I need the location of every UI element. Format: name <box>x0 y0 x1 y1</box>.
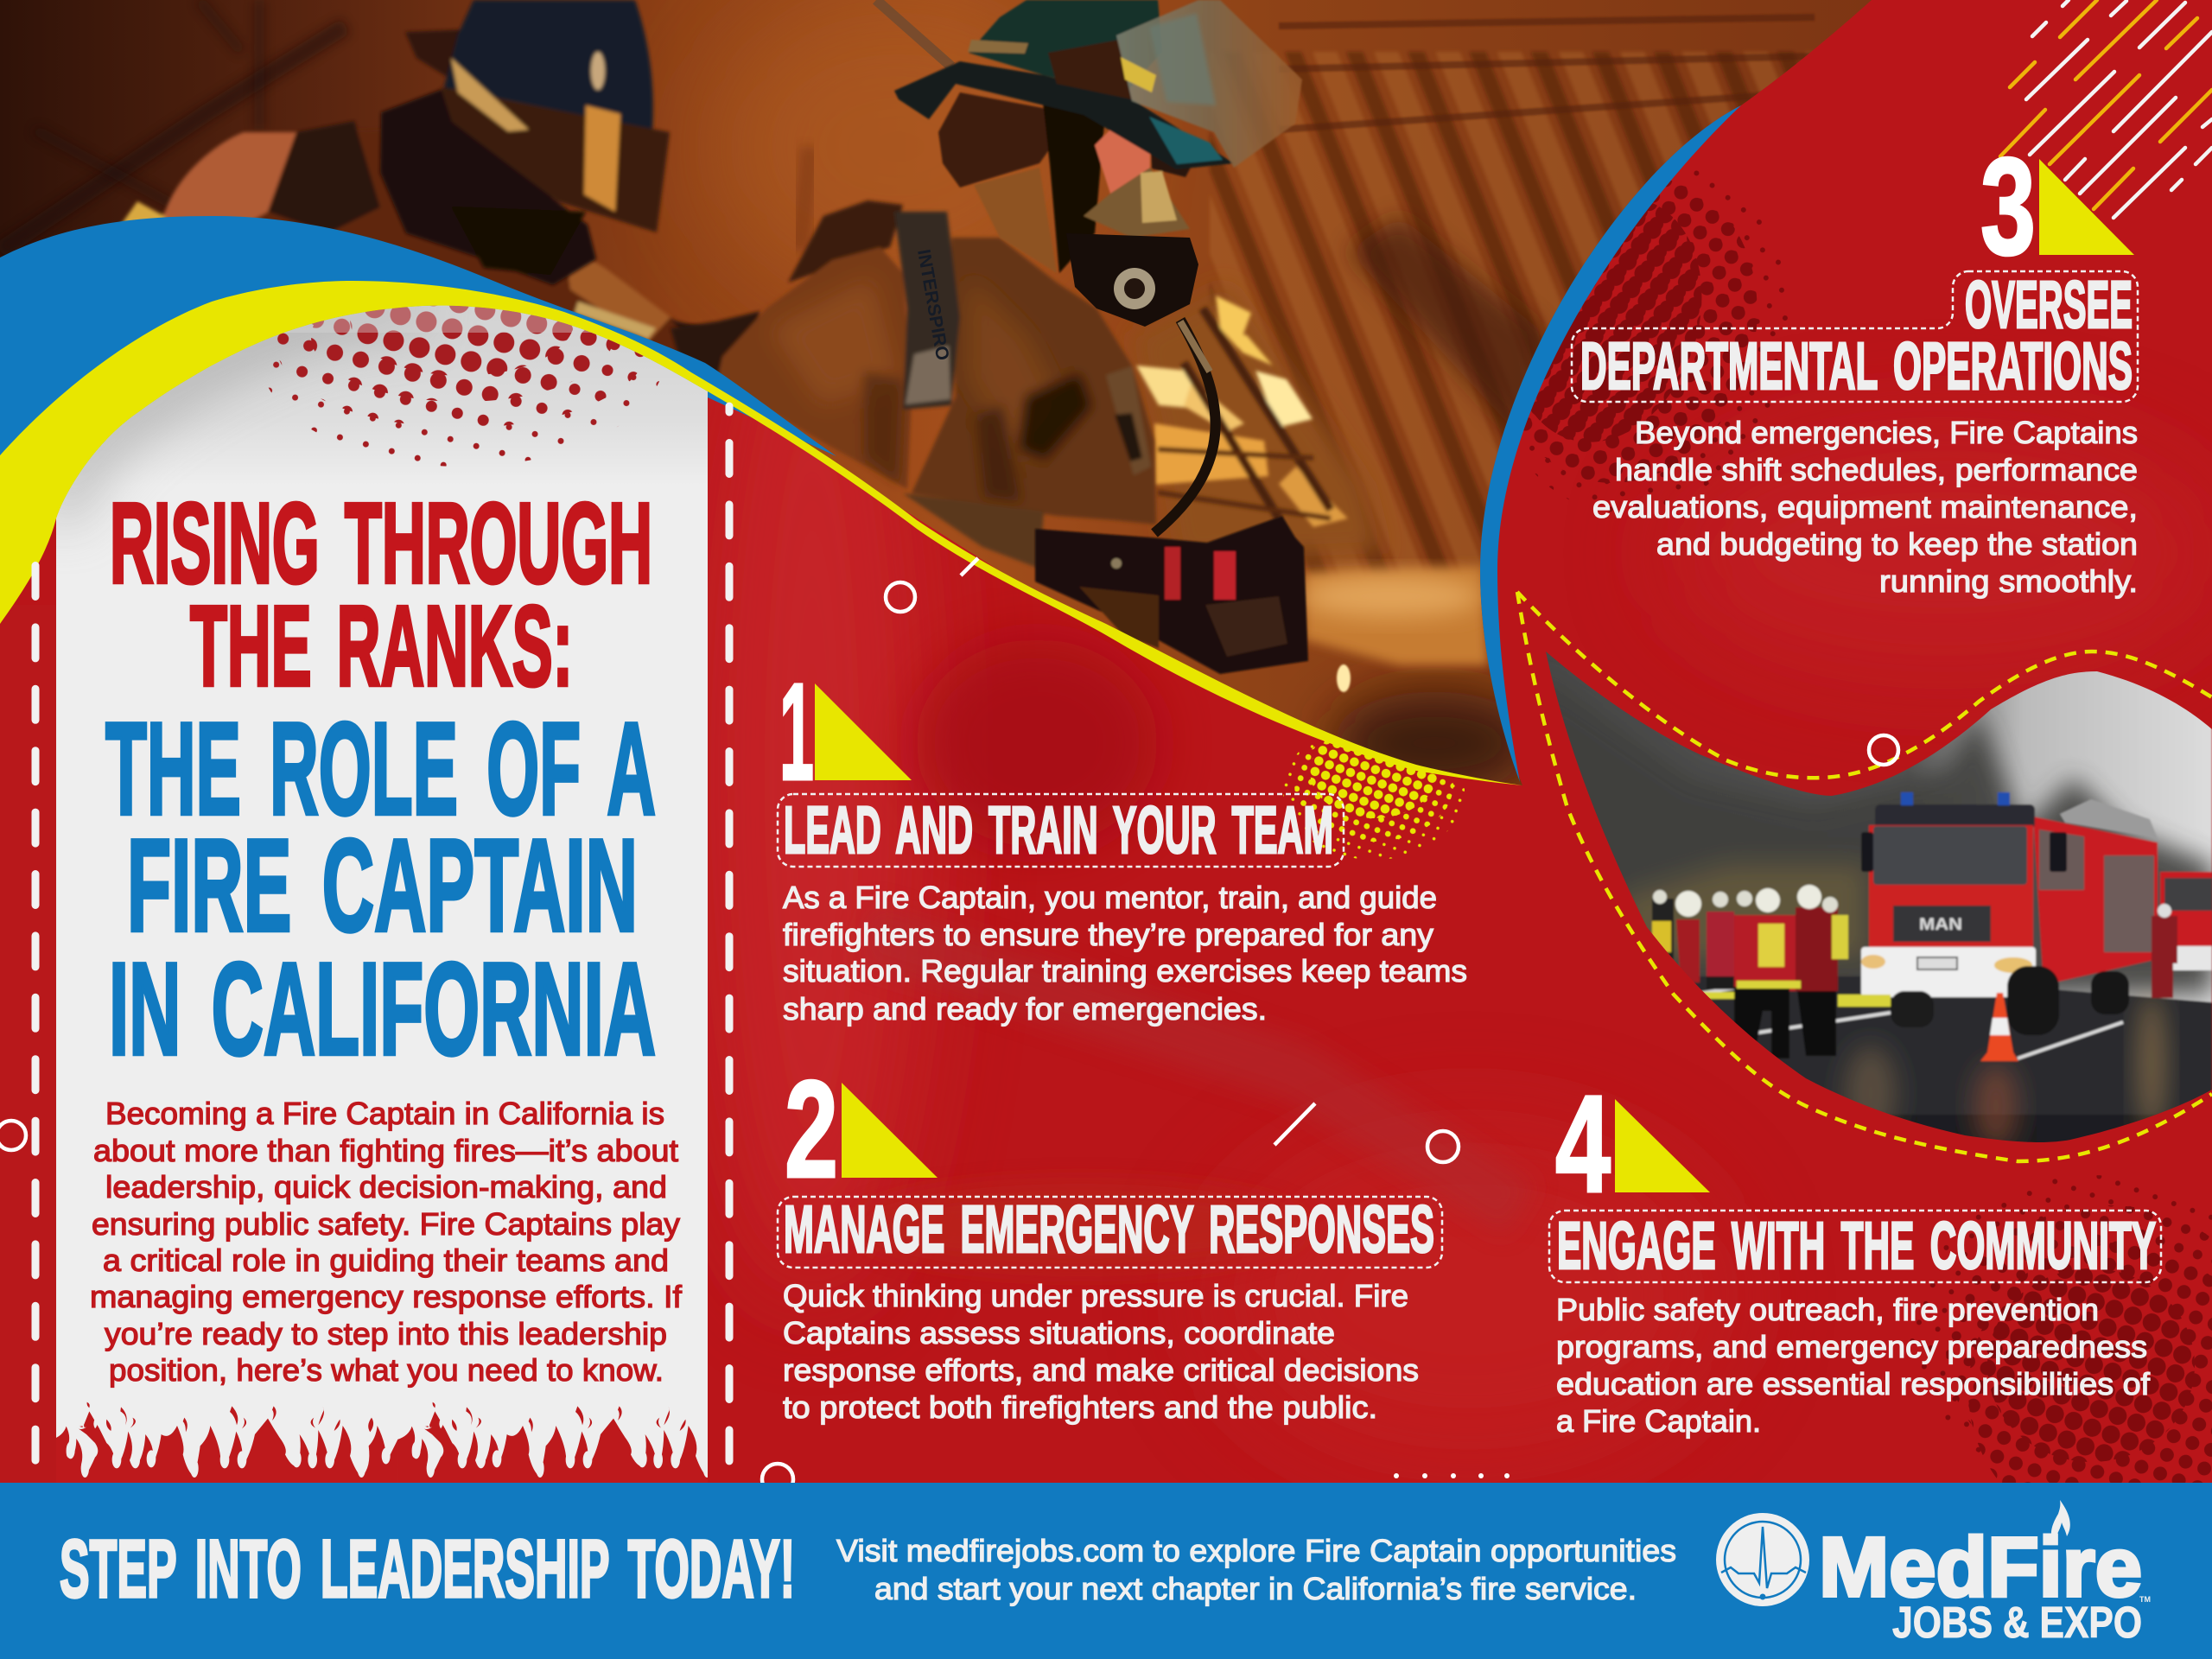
body 4: programs, and emergency preparedness <box>1556 1329 2147 1364</box>
body 3: and budgeting to keep the station <box>1656 526 2138 562</box>
decor: dashed side lines <box>35 406 729 1469</box>
triangle marker 4 <box>1615 1099 1710 1192</box>
body 1: situation. Regular training exercises keep teams <box>783 953 1467 988</box>
heading 2: MANAGE EMERGENCY RESPONSES <box>784 1192 1434 1267</box>
yellow dashed outline around truck photo <box>1517 592 2212 1161</box>
intro text block: about more than fighting fires—it’s about <box>93 1133 678 1168</box>
decor: diagonal streaks top right <box>2000 0 2212 218</box>
item 1: lead and train <box>778 654 1467 1027</box>
intro text block: managing emergency response efforts. If <box>90 1279 683 1314</box>
trees <box>1538 674 2212 994</box>
truck body: MAN <box>1919 916 1962 934</box>
number 2: 2 <box>785 1052 838 1206</box>
icon: heartbeat emblem <box>1716 1513 1809 1606</box>
body 2 <box>783 1278 1419 1425</box>
halftone: dark red dots behind item 3 <box>1449 125 1834 552</box>
body 4: a Fire Captain. <box>1556 1403 1761 1439</box>
logo: MedFire Jobs & Expo <box>1716 1500 2151 1647</box>
title: rising through the ranks: THE RANKS: <box>190 582 573 709</box>
body 3: handle shift schedules, performance <box>1615 452 2138 487</box>
heading 1: LEAD AND TRAIN YOUR TEAM <box>784 793 1333 868</box>
photo: fire truck and crew in fog <box>1538 639 2212 1158</box>
body 4 <box>1556 1292 2151 1439</box>
wet road <box>1642 976 2212 1158</box>
body 2: to protect both firefighters and the public. <box>783 1389 1377 1425</box>
number 4: 4 <box>1555 1066 1611 1221</box>
panel: title and intro background <box>56 306 708 1483</box>
item 2: manage emergency responses <box>778 1052 1442 1425</box>
crescent: blue edge of upper right panel <box>1480 105 1741 782</box>
intro text block <box>90 1096 683 1388</box>
heading 1 <box>778 793 1344 868</box>
photo: firefighters inside burning building <box>0 0 1901 795</box>
logo: MedFire Jobs & Expo: TM <box>2139 1595 2151 1604</box>
body 1: As a Fire Captain, you mentor, train, and guide <box>783 880 1437 915</box>
icon: flame <box>2051 1500 2070 1544</box>
intro text block: leadership, quick decision-making, and <box>105 1169 667 1205</box>
body 2: Captains assess situations, coordinate <box>783 1315 1335 1351</box>
heading 3 <box>1572 268 2138 404</box>
halftone: dark red dots bottom right <box>1910 1175 2212 1483</box>
title: rising through the ranks: IN CALIFORNIA <box>109 936 656 1083</box>
heading 2 <box>778 1192 1442 1268</box>
firefighter one: helmet and visor <box>380 0 670 285</box>
item 1: lead and train: 1 <box>779 654 814 809</box>
item 3: oversee departmental operations <box>1572 129 2138 599</box>
body 4: Public safety outreach, fire prevention <box>1556 1292 2099 1327</box>
triangle marker 1 <box>815 683 912 780</box>
triangle marker 2 <box>842 1083 938 1178</box>
firefighter two: pack and coat <box>671 200 1156 569</box>
flames along panel bottom <box>56 1391 708 1483</box>
body 3: running smoothly. <box>1879 563 2138 599</box>
body 1: sharp and ready for emergencies. <box>783 991 1267 1027</box>
intro text block: a critical role in guiding their teams and <box>103 1243 669 1278</box>
body 1: firefighters to ensure they’re prepared for any <box>783 917 1433 952</box>
body 3: evaluations, equipment maintenance, <box>1592 489 2138 524</box>
crew <box>1652 885 2177 1058</box>
intro text block: you’re ready to step into this leadership <box>105 1316 667 1351</box>
title: rising through the ranks <box>105 480 656 1083</box>
smoke, beams and roof trusses <box>0 0 1832 795</box>
traffic cone <box>1980 993 2018 1061</box>
halftone: yellow dots <box>1283 721 1465 860</box>
intro text block: ensuring public safety. Fire Captains play <box>92 1206 680 1242</box>
title: rising through the ranks: FIRE CAPTAIN <box>127 812 638 959</box>
decor: five small dots <box>1394 1473 1510 1478</box>
firefighter two: helmet, visor, hood and mask <box>894 0 1302 273</box>
fire glow behind lattice <box>1132 285 1488 692</box>
firefighter one: coat <box>120 119 699 351</box>
footer text: and start your next chapter in California’s fire service. <box>874 1571 1637 1606</box>
title: rising through the ranks: THE ROLE OF A <box>105 696 656 842</box>
wave: blue layer <box>0 216 836 518</box>
strap lettering: INTERSPIRO <box>913 248 952 362</box>
body 3 <box>1592 415 2138 599</box>
footer text <box>836 1533 1676 1606</box>
wave: yellow swoosh <box>0 281 1522 785</box>
firefighter two: breathing regulator and hose <box>1066 233 1216 533</box>
water stream <box>1304 566 1488 665</box>
footer text: Visit medfirejobs.com to explore Fire Captain opportunities <box>836 1533 1676 1568</box>
hose nozzle and glove <box>1035 516 1308 674</box>
title: rising through the ranks: RISING THROUGH <box>110 480 652 607</box>
body 2: response efforts, and make critical decisions <box>783 1352 1419 1388</box>
body 3: Beyond emergencies, Fire Captains <box>1635 415 2138 450</box>
body 2: Quick thinking under pressure is crucial. Fire <box>783 1278 1408 1313</box>
intro text block: Becoming a Fire Captain in California is <box>105 1096 664 1131</box>
decor: small circles and ticks <box>0 558 1459 1495</box>
intro text block: position, here’s what you need to know. <box>109 1352 664 1388</box>
logo: MedFire Jobs & Expo: MedFire <box>1819 1520 2142 1614</box>
item 4: engage with the community <box>1549 1066 2161 1439</box>
second truck <box>2160 872 2212 970</box>
halftone: red dots in panel <box>259 242 665 467</box>
triangle marker 3 <box>2039 159 2134 255</box>
decor: white circle on dashed outline <box>1869 735 1898 765</box>
body 1 <box>783 880 1467 1027</box>
truck body <box>1861 792 2158 1035</box>
number 3: 3 <box>1980 129 2036 283</box>
logo: MedFire Jobs & Expo: JOBS & EXPO <box>1892 1598 2142 1647</box>
footer band <box>0 1483 2212 1659</box>
footer heading: STEP INTO LEADERSHIP TODAY! <box>60 1523 795 1615</box>
body 4: education are essential responsibilities of <box>1556 1366 2151 1402</box>
